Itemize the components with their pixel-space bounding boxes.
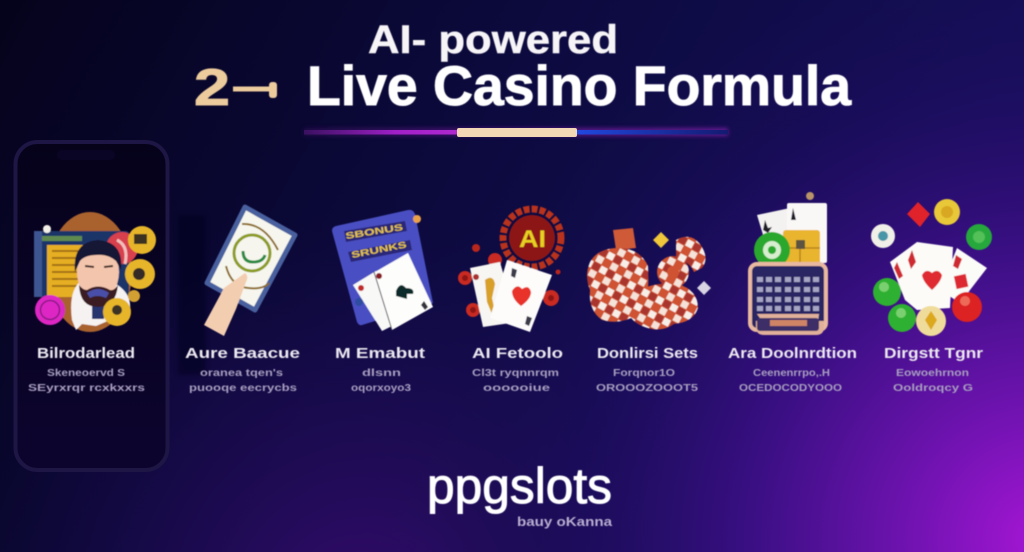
label [335, 345, 425, 394]
logo tagline: bauy oKanna [517, 514, 613, 529]
label: M Emabut [335, 345, 425, 362]
label: Dirgstt Tgnr [884, 345, 983, 362]
label [728, 345, 857, 394]
label: Bilrodarlead [37, 345, 135, 362]
label: Donlirsi Sets [597, 345, 698, 362]
label: Ooldroqcy G [893, 383, 973, 394]
label: dlsnn [362, 368, 401, 379]
step 3: cards and panel [332, 210, 433, 394]
label: Skeneoervd S [47, 368, 125, 379]
icon: AI chip with cards [458, 209, 561, 332]
label: OCEDOCODYOOO [739, 383, 842, 394]
step 7: cards and coloured chips [871, 199, 992, 394]
label [884, 345, 983, 394]
step 1: broadcast dealer [28, 212, 156, 394]
label: Aure Baacue [185, 345, 300, 362]
label [472, 345, 563, 394]
title divider bar [304, 128, 728, 137]
dark shadow panel [178, 215, 206, 375]
number 2 with arrow [194, 59, 277, 117]
phone frame [16, 142, 168, 470]
step 5: chip stacks [587, 228, 711, 394]
label: oqorxoyo3 [351, 383, 412, 394]
label: oooooiue [483, 383, 551, 394]
label: puooqe eecrycbs [189, 383, 298, 394]
step 6: keyboard and cards [728, 192, 857, 394]
label: Forqnor1O [613, 368, 675, 379]
icon: blue board with cards [332, 210, 433, 331]
icon: AI chip with cards: AI [519, 226, 546, 253]
icon: cards with chips [871, 199, 992, 336]
label: Eowoehrnon [896, 368, 969, 379]
label [28, 345, 146, 394]
icon: blue board with cards: SBONUS [345, 222, 404, 241]
logo: ppgslots: ppgslots [427, 458, 612, 514]
icon: blue board with cards: SRUNKS [350, 239, 407, 260]
icon: hand holding card [204, 207, 295, 336]
label [596, 345, 699, 394]
number 2 with arrow: 2 [194, 59, 230, 117]
label: Ceenenrrpo,.H [753, 368, 830, 379]
label [185, 345, 300, 394]
step 4: AI chip and cards [458, 209, 563, 394]
label: oranea tqen's [200, 368, 284, 379]
icon: checkered chips [587, 228, 711, 330]
icon: dealer with coins [34, 212, 156, 332]
label: Cl3t ryqnnrqm [472, 368, 559, 379]
label: OROOOZOOOT5 [596, 383, 699, 394]
title: Live Casino Formula: Live Casino Formula [307, 54, 852, 117]
step 2: card in hand [185, 207, 300, 394]
label: AI Fetoolo [472, 345, 563, 362]
label: Ara Doolnrdtion [728, 345, 857, 362]
icon: keyboard with cards and chip [750, 192, 827, 335]
label: SEyrxrqr rcxkxxrs [28, 383, 146, 394]
title: AI-powered: AI- powered [368, 18, 618, 62]
